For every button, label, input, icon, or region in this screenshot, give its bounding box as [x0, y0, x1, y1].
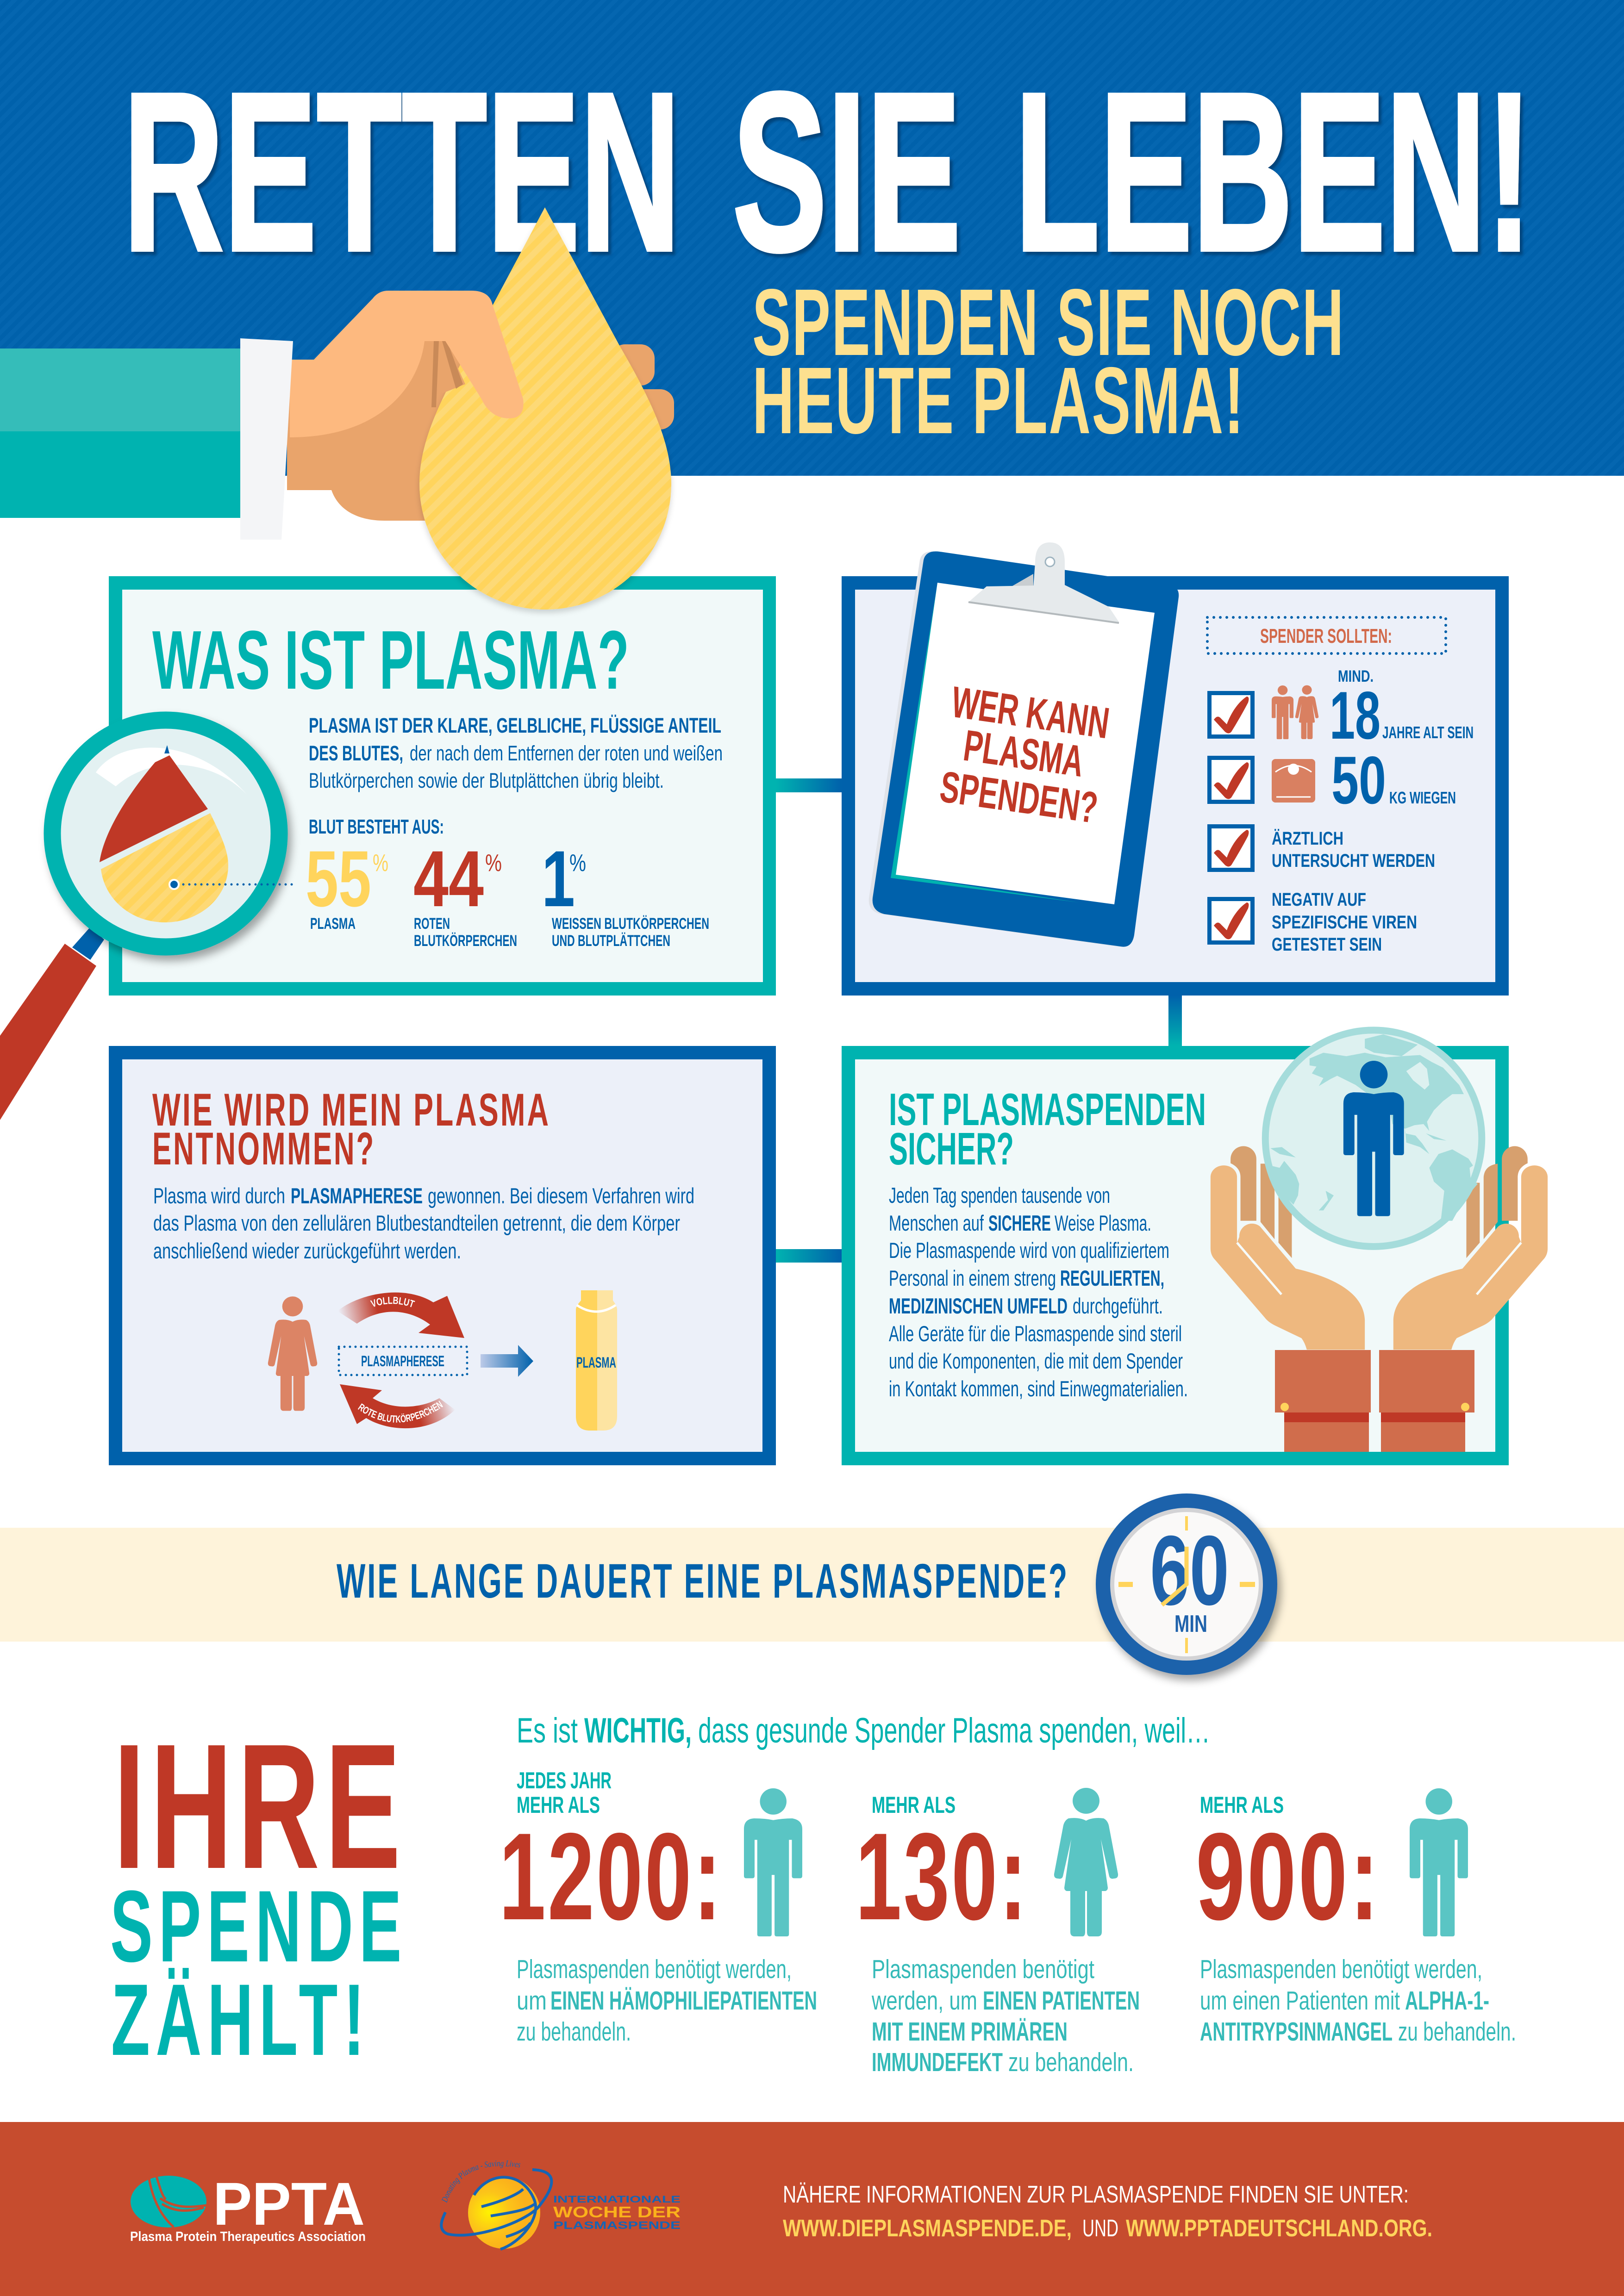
- heading: ist plasmaspenden sicher: IST PLASMASPENDEN: [889, 1084, 1206, 1135]
- text: es ist wichtig: WICHTIG,: [584, 1711, 692, 1750]
- item: weight: 50: [1331, 742, 1386, 818]
- text: plasma definition: PLASMA IST DER KLARE, GELBLICHE, FLÜSSIGE ANTEIL: [309, 714, 721, 737]
- subtitle: HEUTE PLASMA!: [752, 348, 1245, 454]
- footer band: [0, 2122, 1624, 2296]
- icon: plasma bottle: [576, 1290, 617, 1431]
- text: 900 description: ALPHA-1-: [1405, 1986, 1489, 2016]
- item: age: JAHRE ALT SEIN: [1382, 723, 1474, 742]
- text: plasmapherese description: gewonnen. Bei diesem Verfahren wird: [428, 1183, 694, 1208]
- icon: plasma drop: [419, 207, 671, 610]
- text: more information: WWW.PPTADEUTSCHLAND.ORG.: [1126, 2215, 1432, 2242]
- icon: clock 60 min: [1096, 1493, 1277, 1675]
- text: 1200 description: [517, 1954, 817, 2047]
- illustration: hand with sleeve and plasma drop: [0, 207, 674, 610]
- text: 130 description: EINEN PATIENTEN: [983, 1986, 1140, 2016]
- text: safety description: durchgeführt.: [1073, 1294, 1163, 1318]
- item: virus test: [1209, 890, 1417, 955]
- arrow: vollblut: VOLLBLUT: [369, 1294, 416, 1310]
- item: virus test: NEGATIV AUF: [1272, 890, 1366, 910]
- band: duration: [0, 1528, 1624, 1642]
- stat: 44 percent red cells: BLUTKÖRPERCHEN: [414, 932, 517, 950]
- heading: ihre spende zaehlt: ZÄHLT!: [111, 1963, 370, 2077]
- heading: wer kann plasma spenden: WER KANN: [949, 678, 1112, 748]
- text: 130 description: IMMUNDEFEKT: [872, 2047, 1003, 2077]
- icon: cuffs: [1275, 1350, 1474, 1452]
- text: plasma definition: Blutkörperchen sowie der Blutplättchen übrig bleibt.: [309, 769, 664, 792]
- logo: international plasma awareness week: INTERNATIONALE: [553, 2194, 681, 2205]
- checklist: donor requirements: [1207, 617, 1474, 955]
- stat: 900 alpha-1: 900:: [1196, 1807, 1381, 1946]
- icon: man: [1410, 1788, 1468, 1936]
- icon: shirt cuff: [240, 338, 293, 540]
- connector: top horizontal: [776, 778, 842, 792]
- title: [123, 46, 1532, 298]
- heading: was ist plasma: WAS IST PLASMA?: [152, 614, 629, 707]
- logo: PPTA: [130, 2170, 366, 2244]
- stat: 900 alpha-1: MEHR ALS: [1200, 1792, 1284, 1818]
- text: safety description: und die Komponenten, die mit dem Spender: [889, 1349, 1183, 1373]
- text: 900 description: Plasmaspenden benötigt werden,: [1200, 1954, 1482, 1984]
- stat: 44 percent red cells: [413, 834, 517, 950]
- icon: woman: [1054, 1788, 1118, 1936]
- icon: globe: [1265, 1030, 1482, 1246]
- header band: [0, 0, 1624, 476]
- heading: wer kann plasma spenden: SPENDEN?: [937, 762, 1101, 833]
- text: 900 description: [1200, 1954, 1516, 2047]
- text: more information: [783, 2181, 1432, 2242]
- text: es ist wichtig: Es ist: [517, 1711, 578, 1750]
- connector: vertical: [1168, 996, 1182, 1046]
- text: 130 description: MIT EINEM PRIMÄREN: [872, 2017, 1068, 2047]
- item: age: MIND.: [1338, 667, 1374, 685]
- label: spender sollten: [1207, 617, 1446, 653]
- label: blut besteht aus: BLUT BESTEHT AUS:: [309, 815, 444, 838]
- logo: international plasma awareness week: [440, 2159, 681, 2249]
- item: age: [1209, 667, 1474, 753]
- text: safety description: [889, 1183, 1188, 1401]
- stat: 1200 haemophilia: JEDES JAHR: [517, 1767, 612, 1793]
- panel: ist plasmaspenden sicher: [842, 1046, 1509, 1465]
- stat: 55 percent plasma: %: [373, 850, 388, 877]
- text: 130 description: [871, 1954, 1140, 2077]
- text: 1200 description: EINEN HÄMOPHILIEPATIENTEN: [550, 1986, 817, 2016]
- text: plasma definition: DES BLUTES,: [309, 741, 403, 765]
- text: more information: UND: [1082, 2215, 1118, 2242]
- stat: 44 percent red cells: 44: [413, 834, 484, 923]
- icon: clock 60 min: 60: [1150, 1515, 1229, 1626]
- text: 130 description: zu behandeln.: [1008, 2047, 1134, 2077]
- text: 1200 description: Plasmaspenden benötigt werden,: [517, 1954, 792, 1984]
- text: 1200 description: zu behandeln.: [517, 2017, 631, 2047]
- icon: thumb and fingers: [290, 291, 524, 437]
- stat: 55 percent plasma: PLASMA: [310, 915, 356, 933]
- icon: back fingers: [1230, 1146, 1528, 1258]
- item: examination: UNTERSUCHT WERDEN: [1272, 851, 1435, 871]
- text: safety description: Alle Geräte für die Plasmaspende sind steril: [889, 1321, 1182, 1346]
- text: more information: NÄHERE INFORMATIONEN ZUR PLASMASPENDE FINDEN SIE UNTER:: [783, 2181, 1409, 2208]
- panel: wie wird mein plasma entnommen: [109, 1046, 776, 1465]
- text: plasma definition: [309, 714, 723, 792]
- text: plasmapherese description: [153, 1183, 694, 1263]
- heading: ihre spende zaehlt: [110, 1706, 407, 2077]
- icon: left hand: [1211, 1165, 1365, 1350]
- text: es ist wichtig: [517, 1711, 1210, 1750]
- text: more information: WWW.DIEPLASMASPENDE.DE,: [783, 2215, 1072, 2242]
- title: SIE: [732, 46, 961, 298]
- icon: donor figure: [268, 1296, 317, 1411]
- item: weight: [1209, 742, 1456, 818]
- stat: 130 immune deficiency: 130:: [856, 1807, 1029, 1946]
- stat: 1 percent white cells: 1: [542, 834, 575, 923]
- text: safety description: Personal in einem streng: [889, 1266, 1056, 1290]
- heading: wie wird mein plasma entnommen: WIE WIRD MEIN PLASMA: [152, 1084, 550, 1135]
- panel: wer kann plasma spenden: [842, 576, 1509, 996]
- text: safety description: SICHERE: [988, 1211, 1051, 1235]
- callout: dotted leader: [169, 879, 297, 890]
- icon: clip: [968, 542, 1119, 623]
- stat: 1 percent white cells: [542, 834, 709, 950]
- heading: wie wird mein plasma entnommen: [152, 1084, 550, 1174]
- logo: PPTA: Plasma Protein Therapeutics Association: [130, 2229, 366, 2244]
- text: safety description: MEDIZINISCHEN UMFELD: [889, 1294, 1068, 1318]
- text: 900 description: ANTITRYPSINMANGEL: [1200, 2017, 1393, 2047]
- stat: 130 immune deficiency: [856, 1788, 1140, 2077]
- arrow: rote blutkoerperchen: ROTE BLUTKÖRPERCHEN: [356, 1399, 445, 1425]
- title: RETTEN: [123, 46, 681, 298]
- icon: man: [744, 1788, 802, 1936]
- panel: was ist plasma: [109, 576, 776, 996]
- illustration: clipboard: [869, 542, 1179, 947]
- item: virus test: GETESTET SEIN: [1272, 934, 1382, 955]
- logo: international plasma awareness week: WOCHE DER: [553, 2203, 681, 2221]
- logo: international plasma awareness week: Donating Plasma - Saving Lives: [440, 2159, 521, 2204]
- text: safety description: Die Plasmaspende wird von qualifiziertem: [889, 1238, 1169, 1263]
- stat: 1200 haemophilia: [499, 1767, 817, 2047]
- text: 900 description: um einen Patienten mit: [1200, 1986, 1400, 2016]
- icon: palm: [287, 341, 468, 521]
- heading: wie lange dauert eine plasmaspende: WIE LANGE DAUERT EINE PLASMASPENDE?: [337, 1554, 1069, 1608]
- stat: 900 alpha-1: [1196, 1788, 1516, 2047]
- item: age: 18: [1330, 678, 1380, 753]
- heading: wer kann plasma spenden: PLASMA: [961, 721, 1087, 786]
- icon: magnifying glass: [0, 720, 297, 1120]
- heading: wie wird mein plasma entnommen: ENTNOMMEN?: [152, 1123, 375, 1174]
- label: plasmapherese box: [339, 1347, 467, 1375]
- text: plasmapherese description: Plasma wird durch: [153, 1183, 285, 1208]
- logo: international plasma awareness week: PLASMASPENDE: [553, 2219, 681, 2231]
- arrow: to plasma bottle: [481, 1345, 533, 1377]
- icon: back fingers: [611, 344, 674, 429]
- heading: ihre spende zaehlt: IHRE: [113, 1706, 406, 1906]
- text: safety description: in Kontakt kommen, sind Einwegmaterialien.: [889, 1376, 1188, 1401]
- text: 1200 description: um: [517, 1986, 547, 2016]
- stat: 1 percent white cells: %: [569, 850, 586, 877]
- text: 130 description: Plasmaspenden benötigt: [872, 1954, 1094, 1984]
- text: plasmapherese description: das Plasma von den zellulären Blutbestandteilen getrennt, die dem Körper: [153, 1211, 680, 1235]
- illustration: globe and hands: [1211, 1030, 1548, 1350]
- icon: plasma bottle: PLASMA: [576, 1354, 616, 1371]
- stat: 1200 haemophilia: MEHR ALS: [517, 1792, 600, 1818]
- icon: right hand: [1393, 1165, 1548, 1350]
- arrow: rote blutkoerperchen: [340, 1384, 455, 1428]
- stat: 55 percent plasma: 55: [306, 834, 371, 923]
- text: safety description: Weise Plasma.: [1055, 1211, 1151, 1235]
- item: examination: ÄRZTLICH: [1272, 828, 1343, 849]
- text: safety description: Jeden Tag spenden tausende von: [889, 1183, 1110, 1207]
- stat: 1 percent white cells: WEISSEN BLUTKÖRPERCHEN: [552, 915, 709, 933]
- stat: 44 percent red cells: ROTEN: [414, 915, 450, 933]
- icon: person in globe: [1343, 1061, 1404, 1216]
- heading: ist plasmaspenden sicher: SICHER?: [889, 1123, 1014, 1174]
- label: spender sollten: SPENDER SOLLTEN:: [1260, 625, 1392, 647]
- text: plasmapherese description: PLASMAPHERESE: [291, 1183, 423, 1208]
- icon: clock 60 min: MIN: [1174, 1611, 1207, 1637]
- text: safety description: REGULIERTEN,: [1060, 1266, 1164, 1290]
- stat: 1200 haemophilia: 1200:: [499, 1807, 723, 1946]
- text: safety description: Menschen auf: [889, 1211, 984, 1235]
- text: plasma definition: der nach dem Entfernen der roten und weißen: [410, 741, 723, 765]
- stat: 44 percent red cells: %: [485, 850, 502, 877]
- connector: lower horizontal: [776, 1249, 842, 1263]
- subtitle: [752, 269, 1345, 454]
- heading: ist plasmaspenden sicher: [889, 1084, 1206, 1174]
- text: es ist wichtig: dass gesunde Spender Plasma spenden, weil…: [698, 1711, 1210, 1750]
- item: virus test: SPEZIFISCHE VIREN: [1272, 912, 1417, 933]
- stat: 130 immune deficiency: MEHR ALS: [872, 1792, 956, 1818]
- logo: PPTA: PPTA: [213, 2170, 365, 2238]
- label: plasmapherese box: PLASMAPHERESE: [361, 1353, 444, 1369]
- arrow: vollblut: [337, 1293, 464, 1338]
- text: 130 description: werden, um: [871, 1986, 977, 2016]
- heading: wer kann plasma spenden: [937, 678, 1112, 833]
- item: weight: KG WIEGEN: [1389, 788, 1456, 807]
- stat: 1 percent white cells: UND BLUTPLÄTTCHEN: [552, 932, 670, 950]
- text: plasmapherese description: anschließend wieder zurückgeführt werden.: [153, 1238, 461, 1263]
- text: 900 description: zu behandeln.: [1398, 2017, 1516, 2047]
- icon: sleeve: [0, 348, 240, 518]
- heading: ihre spende zaehlt: SPENDE: [110, 1869, 407, 1983]
- icon: blood drop split: [100, 745, 228, 922]
- item: examination: [1209, 827, 1435, 871]
